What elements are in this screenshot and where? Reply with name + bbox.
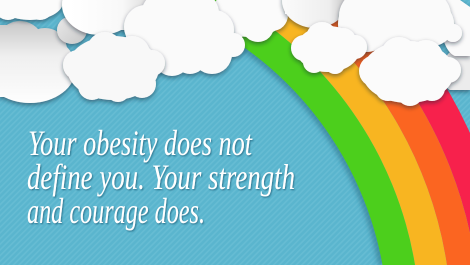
cloud: far right top — [440, 0, 470, 56]
cloud: front right — [359, 37, 461, 106]
band: red — [332, 0, 470, 233]
band: yellow — [229, 0, 447, 265]
clouds — [0, 0, 470, 106]
band: orange — [287, 0, 470, 265]
cloud: top near rainbow — [212, 0, 288, 42]
cloud: back right — [442, 52, 470, 90]
cloud: large top right — [338, 0, 462, 53]
cloud: large right of centre — [124, 0, 245, 76]
quote text — [27, 123, 295, 231]
quote text: Your obesity does not — [28, 123, 253, 163]
cloud: front left — [63, 32, 165, 102]
cloud: top left — [0, 0, 63, 20]
cloud: back left large — [0, 21, 76, 103]
quote text: define you. Your strength — [27, 157, 295, 197]
cloud: small grey behind centre — [57, 16, 87, 44]
cloud: top band behind centre — [282, 0, 348, 28]
cloud: top centre — [62, 0, 170, 35]
cloud: centre on rainbow — [291, 22, 367, 74]
band: green — [149, 0, 415, 265]
rainbow — [149, 0, 470, 265]
quote text: and courage does. — [27, 191, 205, 231]
